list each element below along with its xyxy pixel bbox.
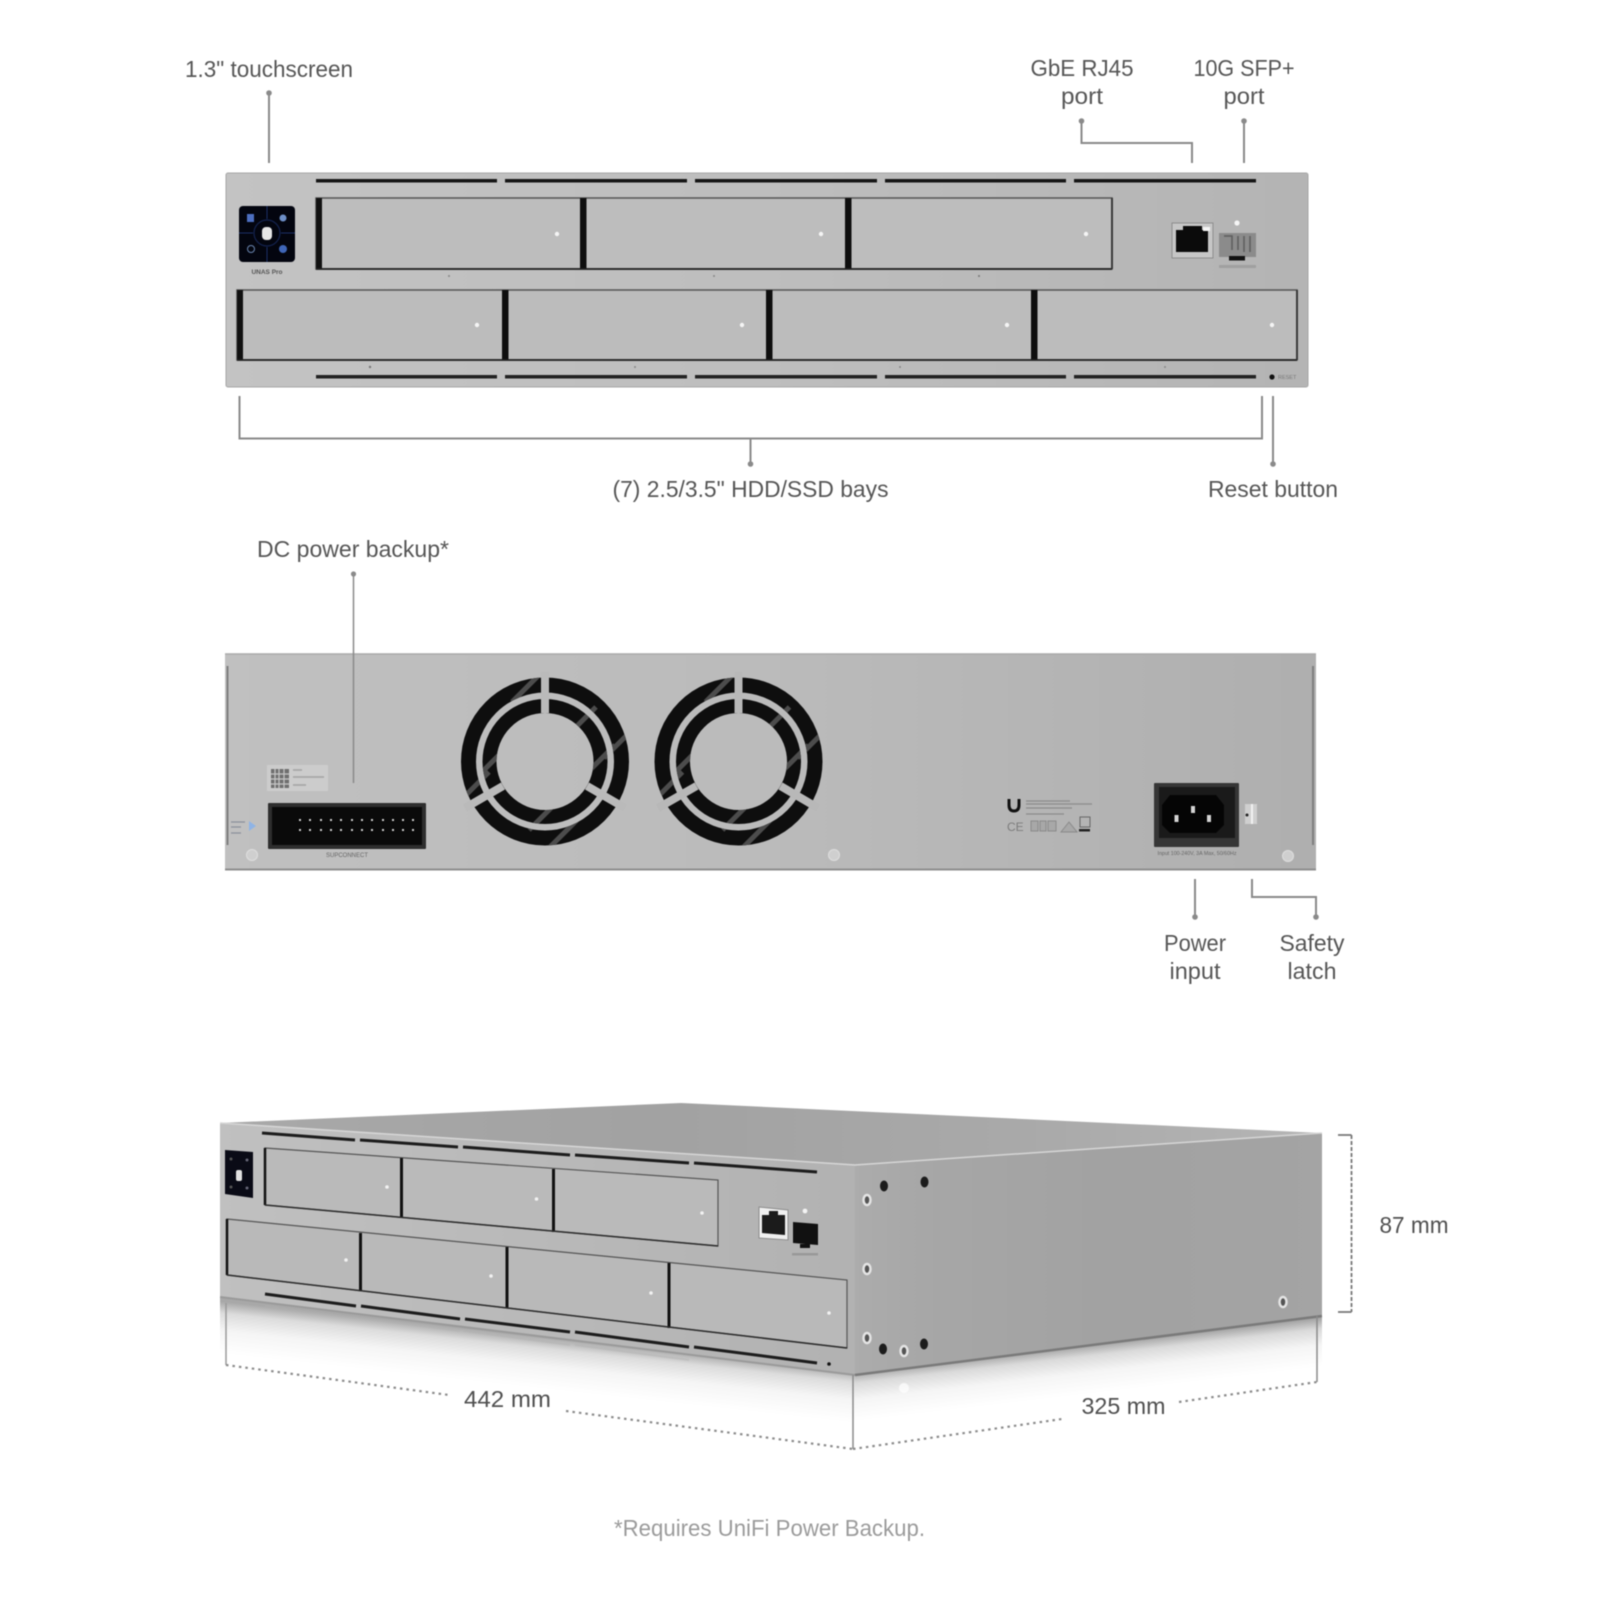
label: reset button: Reset button xyxy=(1208,476,1338,502)
label: 10G SFP+ port: 10G SFP+ xyxy=(1194,55,1294,81)
side face xyxy=(855,1133,1322,1375)
upper bays in perspective xyxy=(265,1148,718,1246)
label: touchscreen: 1.3" touchscreen xyxy=(185,56,353,82)
chassis front plate xyxy=(226,173,1308,387)
label: safety latch: Safety xyxy=(1280,930,1345,956)
label: 10G SFP+ port: port xyxy=(1224,83,1265,109)
panel: perspective view with dimensions xyxy=(220,1103,1322,1445)
connector caption: SUPCONNECT xyxy=(326,853,368,859)
dimension: depth 325 mm xyxy=(853,1316,1317,1449)
dimension: height 87 mm: 87 mm xyxy=(1380,1212,1448,1238)
reset button: RESET xyxy=(1278,375,1297,381)
top vent slots xyxy=(316,179,1256,182)
label: DC power backup xyxy=(257,536,449,783)
floor reflection xyxy=(220,1297,1322,1445)
footnote: *Requires UniFi Power Backup. xyxy=(614,1515,925,1541)
rating text and blue indicator xyxy=(231,821,256,833)
label: reset button xyxy=(1208,396,1338,502)
regulatory marks xyxy=(1007,799,1092,834)
label: power input: input xyxy=(1170,958,1221,984)
label: GbE RJ45 port: GbE RJ45 xyxy=(1030,55,1134,81)
front face xyxy=(220,1123,855,1375)
QR sticker xyxy=(267,765,328,791)
fan grille left xyxy=(459,672,634,847)
label: drive bays bracket xyxy=(240,396,1262,502)
lower bays in perspective xyxy=(227,1219,847,1348)
dimension: depth 325 mm: 325 mm xyxy=(1082,1393,1166,1419)
RJ45 port xyxy=(1172,223,1213,258)
touchscreen in perspective xyxy=(225,1150,253,1198)
safety latch xyxy=(1245,804,1257,824)
fan grille right xyxy=(652,672,828,847)
side rack screws xyxy=(864,1176,1286,1356)
bottom slots xyxy=(265,1294,817,1363)
lower drive bays xyxy=(237,290,1297,368)
label: GbE RJ45 port xyxy=(1030,55,1192,163)
dimension: width 442 mm: 442 mm xyxy=(464,1386,551,1412)
dimension: height 87 mm xyxy=(1338,1135,1448,1312)
label: drive bays bracket: (7) 2.5/3.5" HDD/SSD bays xyxy=(612,476,888,502)
label: touchscreen xyxy=(185,56,353,163)
label: power input: Power xyxy=(1164,930,1226,956)
top face xyxy=(220,1103,1322,1165)
label: power input xyxy=(1164,879,1226,984)
SFP+ port xyxy=(1219,220,1256,268)
rear plate xyxy=(225,654,1316,870)
model label: UNAS Pro xyxy=(251,269,283,276)
reset button xyxy=(1269,374,1297,381)
panel: front view of chassis xyxy=(226,173,1308,387)
upper drive bays xyxy=(316,198,1112,277)
label: safety latch xyxy=(1252,879,1345,984)
label: DC power backup: DC power backup* xyxy=(257,536,449,562)
top slots xyxy=(262,1133,817,1172)
power rating text: Input 100-240V, 3A Max, 50/60Hz xyxy=(1158,851,1237,857)
bottom vent slots xyxy=(316,375,1256,378)
label: GbE RJ45 port: port xyxy=(1061,83,1104,109)
dimension: width 442 mm xyxy=(226,1303,853,1449)
ports in perspective xyxy=(759,1207,831,1366)
panel: rear view of chassis xyxy=(225,654,1316,870)
regulatory marks: CE xyxy=(1007,820,1024,834)
label: 10G SFP+ port xyxy=(1194,55,1294,163)
touchscreen xyxy=(239,206,295,262)
mounting screws xyxy=(246,850,1294,862)
AC power inlet xyxy=(1154,783,1239,847)
label: safety latch: latch xyxy=(1288,958,1336,984)
DC backup connector xyxy=(268,803,426,849)
